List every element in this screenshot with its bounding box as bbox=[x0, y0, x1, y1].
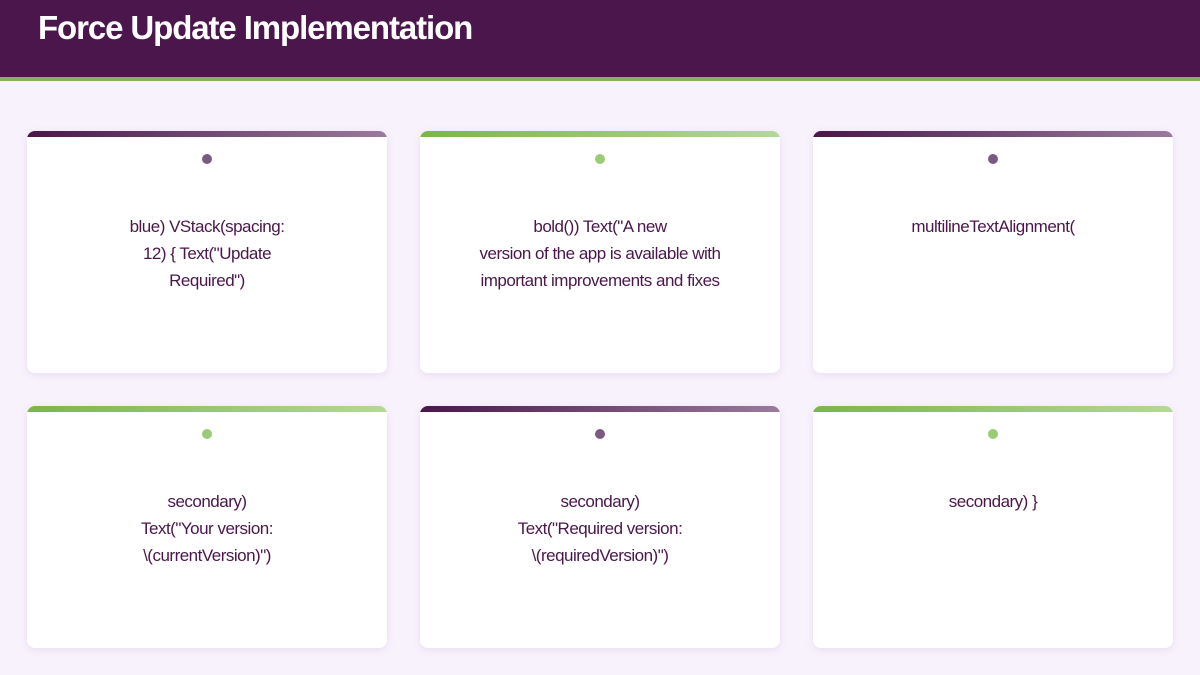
dot bbox=[202, 154, 212, 164]
text: \(requiredVersion)") bbox=[532, 546, 668, 565]
header bbox=[0, 0, 1200, 81]
text bbox=[141, 492, 273, 565]
dot bbox=[988, 429, 998, 439]
text: bold()) Text("A new bbox=[533, 217, 667, 236]
dot bbox=[202, 429, 212, 439]
text: Required") bbox=[169, 271, 245, 290]
title: Force Update Implementation bbox=[38, 9, 472, 46]
dot bbox=[988, 154, 998, 164]
card 4 bbox=[27, 406, 387, 648]
dot bbox=[595, 429, 605, 439]
text: important improvements and fixes bbox=[480, 271, 720, 290]
dot bbox=[595, 154, 605, 164]
card 6 bbox=[813, 406, 1173, 648]
text: version of the app is available with bbox=[480, 244, 720, 263]
card 1 bbox=[27, 131, 387, 373]
text: secondary) } bbox=[949, 492, 1037, 511]
text: \(currentVersion)") bbox=[143, 546, 271, 565]
text: 12) { Text("Update bbox=[143, 244, 271, 263]
text bbox=[518, 492, 682, 565]
card 5 bbox=[420, 406, 780, 648]
text: secondary) bbox=[167, 492, 247, 511]
card 3 bbox=[813, 131, 1173, 373]
card 2 bbox=[420, 131, 780, 373]
text: blue) VStack(spacing: bbox=[130, 217, 284, 236]
text: Text("Your version: bbox=[141, 519, 273, 538]
text: secondary) bbox=[560, 492, 640, 511]
text: Text("Required version: bbox=[518, 519, 682, 538]
text: multilineTextAlignment( bbox=[911, 217, 1075, 236]
text bbox=[130, 217, 284, 290]
text bbox=[480, 217, 720, 290]
